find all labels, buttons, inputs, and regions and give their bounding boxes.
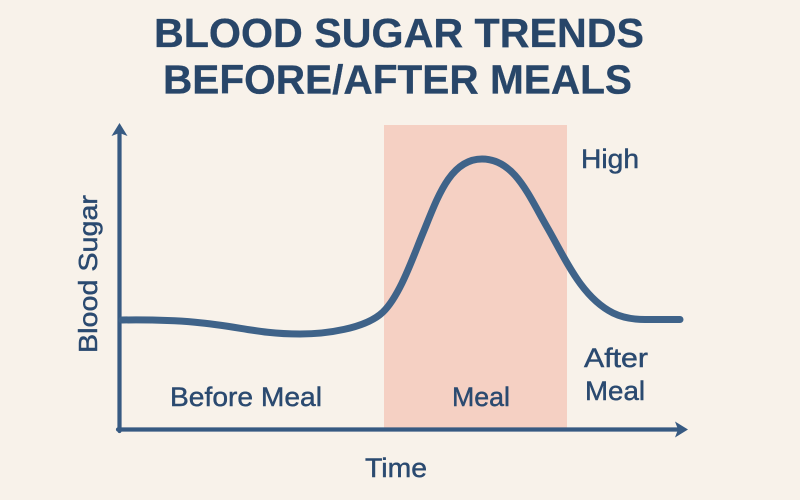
- y axis label: Blood Sugar: [73, 195, 103, 353]
- label: before meal: Before Meal: [170, 382, 322, 412]
- x axis label: Time: [365, 453, 427, 483]
- panel: meal window: [384, 125, 567, 428]
- y axis arrow: [112, 123, 128, 431]
- label: after meal: [584, 343, 648, 406]
- title: [154, 10, 644, 102]
- blood sugar curve: [122, 159, 680, 334]
- label: high: High: [581, 144, 639, 174]
- title: BEFORE/AFTER MEALS: [163, 56, 632, 102]
- label: after meal: After: [584, 343, 648, 373]
- label: meal: Meal: [452, 382, 510, 412]
- label: after meal: Meal: [585, 376, 645, 406]
- x axis arrow: [118, 422, 688, 438]
- title: BLOOD SUGAR TRENDS: [154, 10, 644, 56]
